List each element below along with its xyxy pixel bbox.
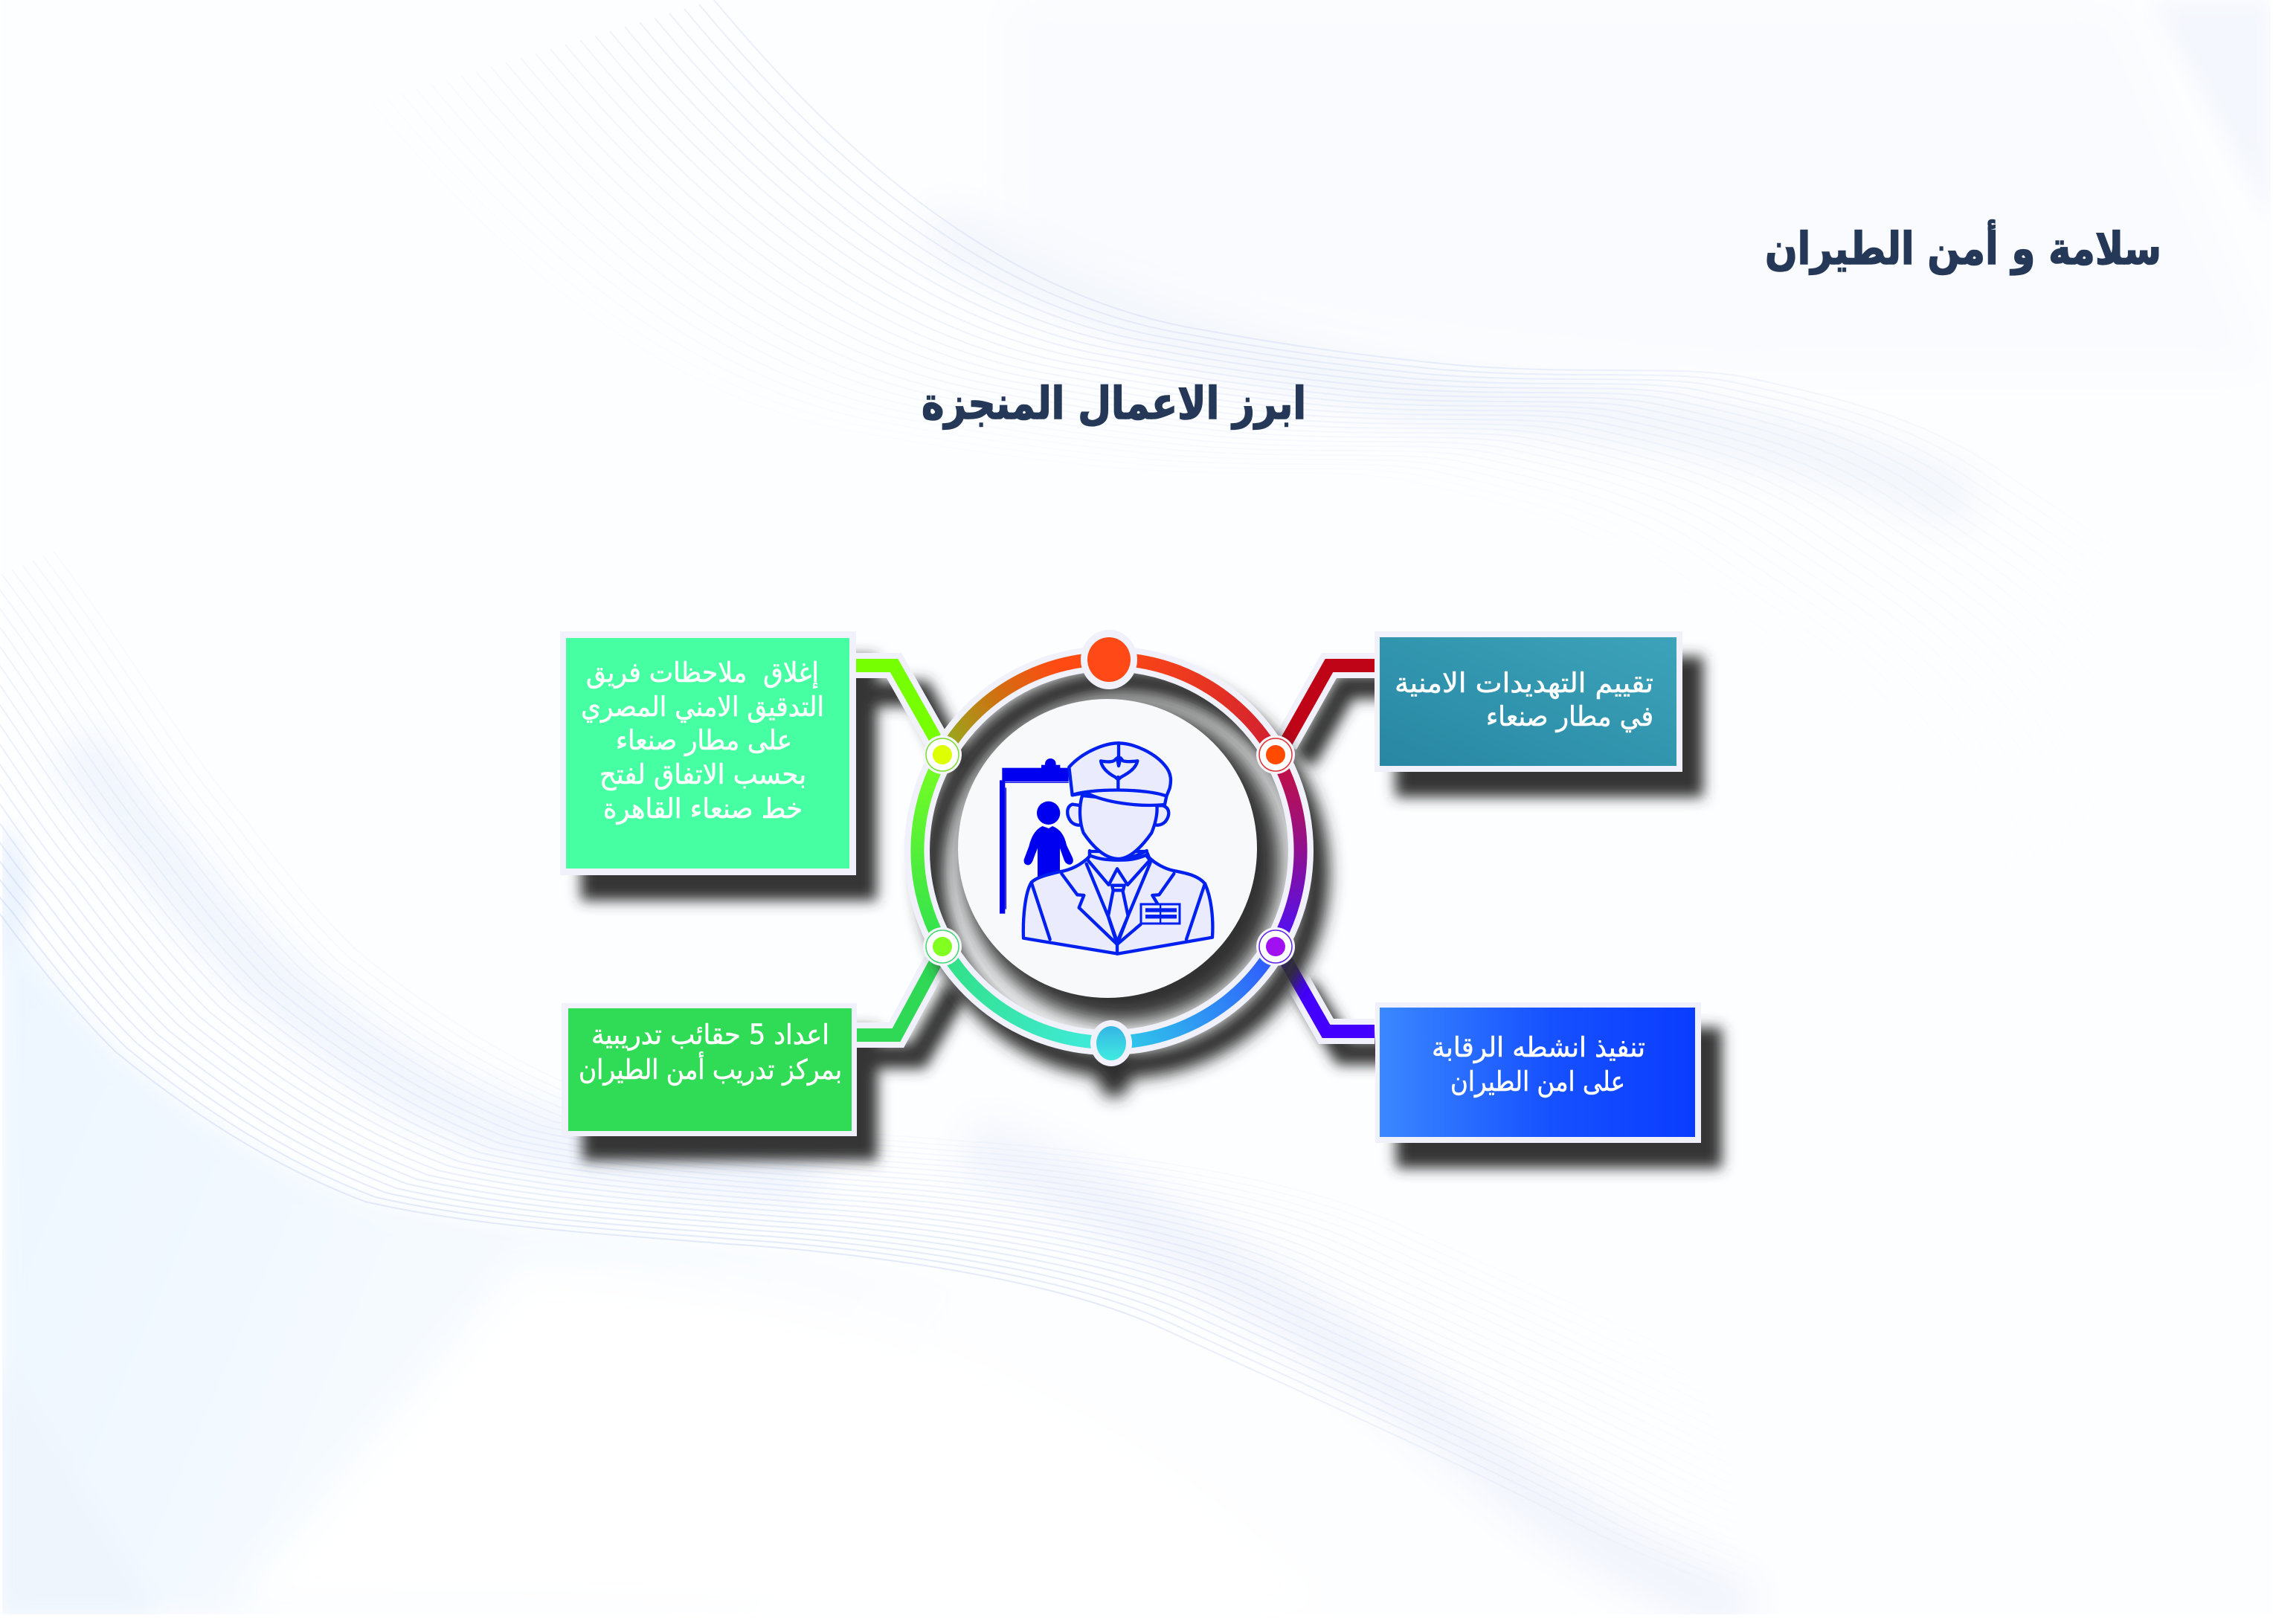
node: upper left yellow (923, 735, 962, 774)
connector: top-right red (1285, 666, 1375, 744)
icon: passenger silhouette (1024, 802, 1073, 879)
icon: security gate (1000, 758, 1069, 914)
node: bottom cyan (1090, 1020, 1132, 1066)
node: lower right purple (1256, 927, 1295, 966)
panel: threat assessment (1375, 631, 1682, 772)
icon: name badge (1141, 904, 1180, 924)
panel: closing audit notes (560, 631, 856, 875)
icon: officer figure (1023, 743, 1212, 954)
panel: closing audit notes: على مطار صنعاء (616, 724, 792, 756)
panel: closing audit notes: التدقيق الامني المصري (581, 691, 824, 723)
ring shadow (932, 681, 1316, 1098)
panel: oversight activities (1375, 1002, 1701, 1143)
connector: bottom-left green (857, 962, 936, 1035)
panel: oversight activities: تنفيذ انشطه الرقابة (1432, 1031, 1645, 1063)
connector: top-left green (856, 666, 936, 739)
node: lower left lime (923, 927, 962, 966)
title: سلامة و أمن الطيران (1765, 219, 2161, 275)
panel: closing audit notes: إغلاق ملاحظات فريق (586, 657, 819, 689)
panel: threat assessment: في مطار صنعاء (1486, 700, 1653, 732)
node: top orange (1081, 630, 1137, 689)
connector shadows and panel shadows (581, 657, 1722, 1168)
connector: bottom-right violet (1285, 959, 1375, 1031)
panel: training packages (562, 1003, 857, 1136)
panel: closing audit notes: خط صنعاء القاهرة (603, 793, 803, 825)
heading: ابرز الاعمال المنجزة (922, 378, 1306, 430)
ring: multicolour circle (917, 659, 1301, 1043)
panel: training packages: اعداد 5 حقائب تدريبية (591, 1019, 829, 1051)
panel: training packages: بمركز تدريب أمن الطيران (579, 1051, 842, 1086)
icon: aviation security officer and walk-through gate (1000, 743, 1212, 954)
panel: oversight activities: على امن الطيران (1450, 1066, 1625, 1098)
panel: threat assessment: تقييم التهديدات الامنية (1395, 667, 1653, 699)
central disc (958, 699, 1281, 1022)
panel: closing audit notes: بحسب الاتفاق لفتح (599, 758, 806, 790)
node: upper right orange (1256, 735, 1295, 774)
